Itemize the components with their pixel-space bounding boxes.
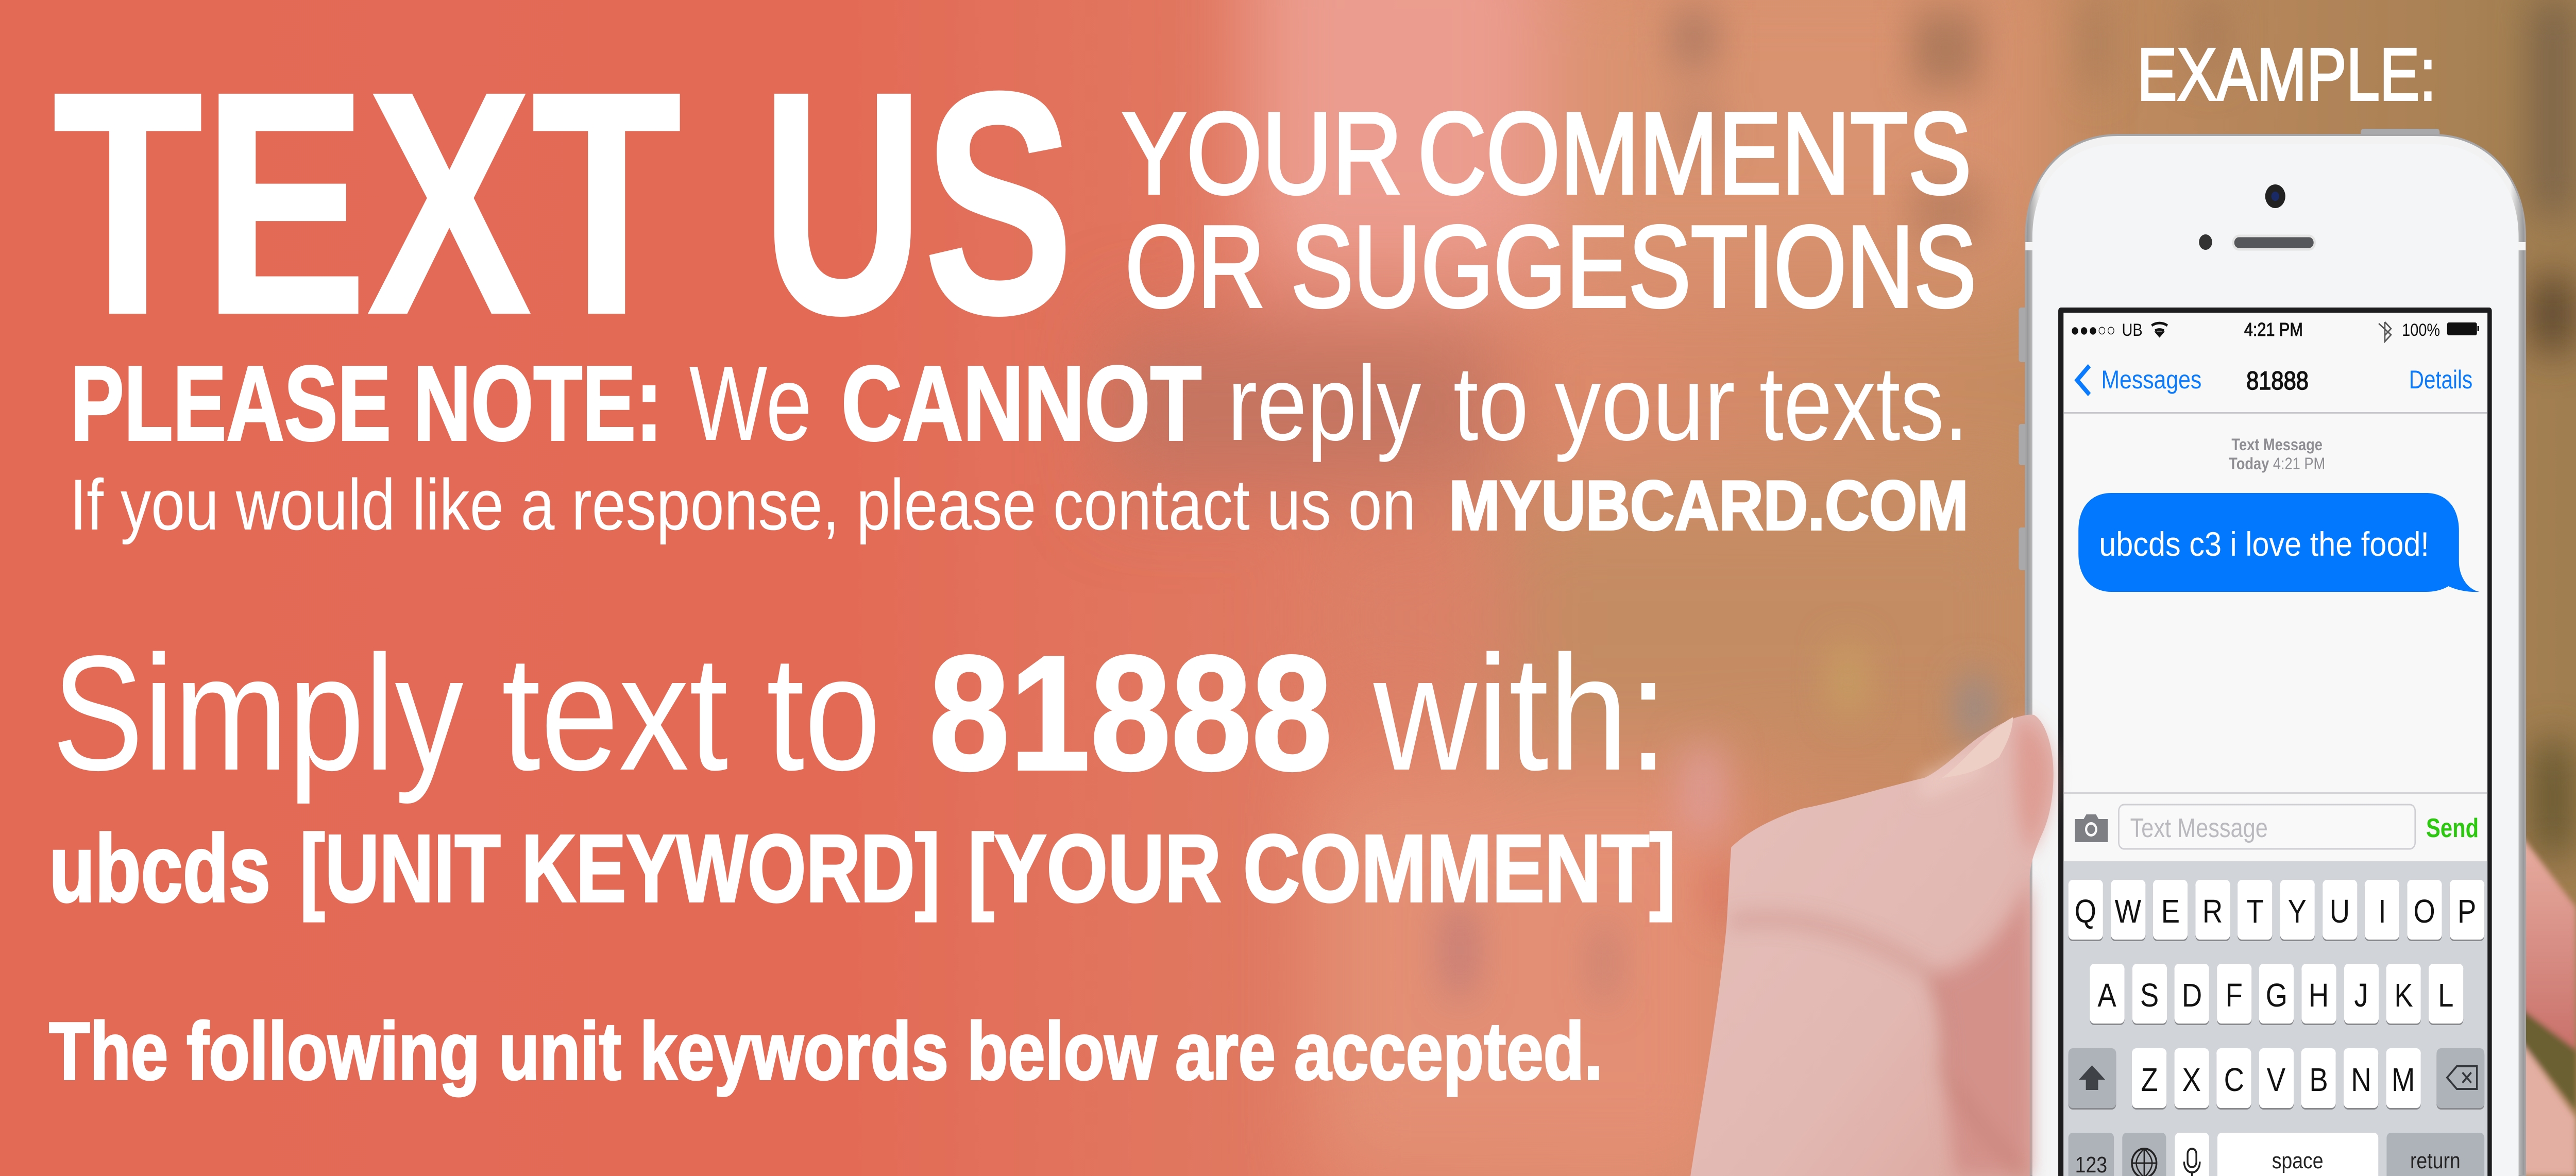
timestamp: Today 4:21 PM — [2229, 455, 2325, 473]
keyboard row 2: D — [2182, 977, 2202, 1014]
keyboard — [2063, 861, 2487, 1176]
instruction: simply text to 81888: with: — [1371, 621, 1668, 805]
navigation bar: Messages — [2101, 365, 2201, 394]
input bar — [2063, 792, 2487, 849]
phone — [2019, 129, 2526, 1176]
keyboard row 1: E — [2161, 893, 2180, 930]
navigation bar — [2063, 365, 2487, 414]
keyboard row 1: U — [2330, 893, 2350, 930]
keyboard row 1: T — [2246, 893, 2264, 930]
navigation bar: Details — [2409, 365, 2472, 394]
label: example: EXAMPLE: — [2137, 33, 2436, 116]
keyboard row 2: L — [2438, 977, 2453, 1014]
keyboard row 4: space — [2272, 1148, 2324, 1173]
keyboard row 3: N — [2351, 1061, 2371, 1098]
contact line: myubcard.com: MYUBCARD.COM — [1449, 466, 1969, 544]
message format: ubcds — [49, 815, 270, 922]
notice line: cannot reply: We — [689, 344, 812, 463]
antenna bands — [2025, 242, 2526, 250]
keyboard row 2 — [2090, 964, 2463, 1025]
notice line: cannot reply: texts. — [1759, 344, 1969, 463]
keyboard row 2: G — [2266, 977, 2287, 1014]
instruction: simply text to 81888: to — [766, 621, 880, 805]
instruction: simply text to 81888: text — [501, 621, 728, 805]
notice line: cannot reply: reply — [1228, 344, 1421, 463]
keyboard row 2: S — [2140, 977, 2159, 1014]
keyboard row 3: B — [2309, 1061, 2328, 1098]
keyboard row 1 — [2069, 880, 2484, 941]
subtitle: your comments or suggestions: COMMENTS — [1418, 89, 1972, 218]
timestamp — [2229, 436, 2325, 473]
keyboard row 2: H — [2309, 977, 2329, 1014]
sensor dot — [2199, 234, 2212, 250]
screen — [2058, 308, 2492, 1176]
input bar: Text Message — [2130, 813, 2268, 843]
status bar: UB — [2122, 320, 2143, 340]
input bar: Send — [2426, 813, 2479, 843]
timestamp: Text Message — [2231, 436, 2323, 454]
note: accepted keywords: The following unit keywords below are accepted. — [49, 1006, 1603, 1097]
title: TEXT US: TEXT — [53, 26, 682, 380]
notice line: cannot reply — [71, 344, 1969, 463]
keyboard row 3: M — [2392, 1061, 2415, 1098]
notice line: cannot reply: to — [1453, 344, 1529, 463]
camera — [2265, 184, 2285, 208]
message format: [YOUR COMMENT] — [968, 815, 1675, 922]
title: TEXT US — [53, 26, 1074, 380]
message format: [UNIT KEYWORD] — [300, 815, 940, 922]
subtitle: your comments or suggestions — [1122, 89, 1976, 331]
keyboard row 1: P — [2458, 893, 2476, 930]
right hand fingers — [2516, 829, 2576, 1176]
subtitle: your comments or suggestions: YOUR — [1122, 89, 1402, 218]
thumbnail — [1942, 717, 2013, 778]
subtitle: your comments or suggestions: OR — [1125, 202, 1265, 331]
instruction: simply text to 81888: 81888 — [929, 621, 1332, 805]
instruction: simply text to 81888: Simply — [52, 621, 463, 806]
subtitle: your comments or suggestions: SUGGESTIONS — [1291, 202, 1976, 331]
message bubble: ubcds c3 i love the food! — [2099, 525, 2429, 563]
keyboard row 4: return — [2410, 1148, 2461, 1173]
keyboard row 1: Q — [2075, 893, 2096, 930]
keyboard row 4 — [2069, 1133, 2484, 1176]
keyboard row 2: J — [2354, 977, 2368, 1014]
notice line: cannot reply: PLEASE NOTE: — [71, 344, 663, 463]
status bar: 100% — [2402, 320, 2440, 340]
instruction: simply text to 81888 — [52, 621, 1668, 806]
keyboard row 3: C — [2224, 1061, 2244, 1098]
keyboard row 3 — [2069, 1048, 2484, 1110]
keyboard row 3: X — [2182, 1061, 2201, 1098]
keyboard row 1: I — [2378, 893, 2386, 930]
keyboard row 3: Z — [2141, 1061, 2158, 1098]
status bar — [2071, 320, 2479, 342]
side buttons — [2019, 129, 2439, 570]
keyboard row 2: F — [2226, 977, 2243, 1014]
message bubble — [2078, 493, 2480, 592]
message format — [49, 815, 1675, 922]
status bar: ●●●○○ — [2071, 320, 2115, 340]
keyboard row 1: W — [2115, 893, 2141, 930]
notice line: cannot reply: your — [1554, 344, 1735, 463]
title: TEXT US: US — [761, 26, 1074, 380]
keyboard row 3: V — [2267, 1061, 2285, 1098]
keyboard row 1: O — [2413, 893, 2435, 930]
status bar: 4:21 PM — [2244, 320, 2303, 340]
thumb and hand — [1690, 714, 2054, 1176]
keyboard row 1: R — [2202, 893, 2223, 930]
speaker — [2233, 236, 2315, 249]
phone body — [2026, 135, 2525, 1176]
keyboard row 2: K — [2394, 977, 2413, 1014]
keyboard row 2: A — [2097, 977, 2116, 1014]
navigation bar: 81888 — [2246, 366, 2309, 395]
contact line: myubcard.com: If you would like a response, please contact us on — [70, 464, 1416, 545]
notice line: cannot reply: CANNOT — [841, 344, 1201, 463]
keyboard row 1: Y — [2288, 893, 2307, 930]
